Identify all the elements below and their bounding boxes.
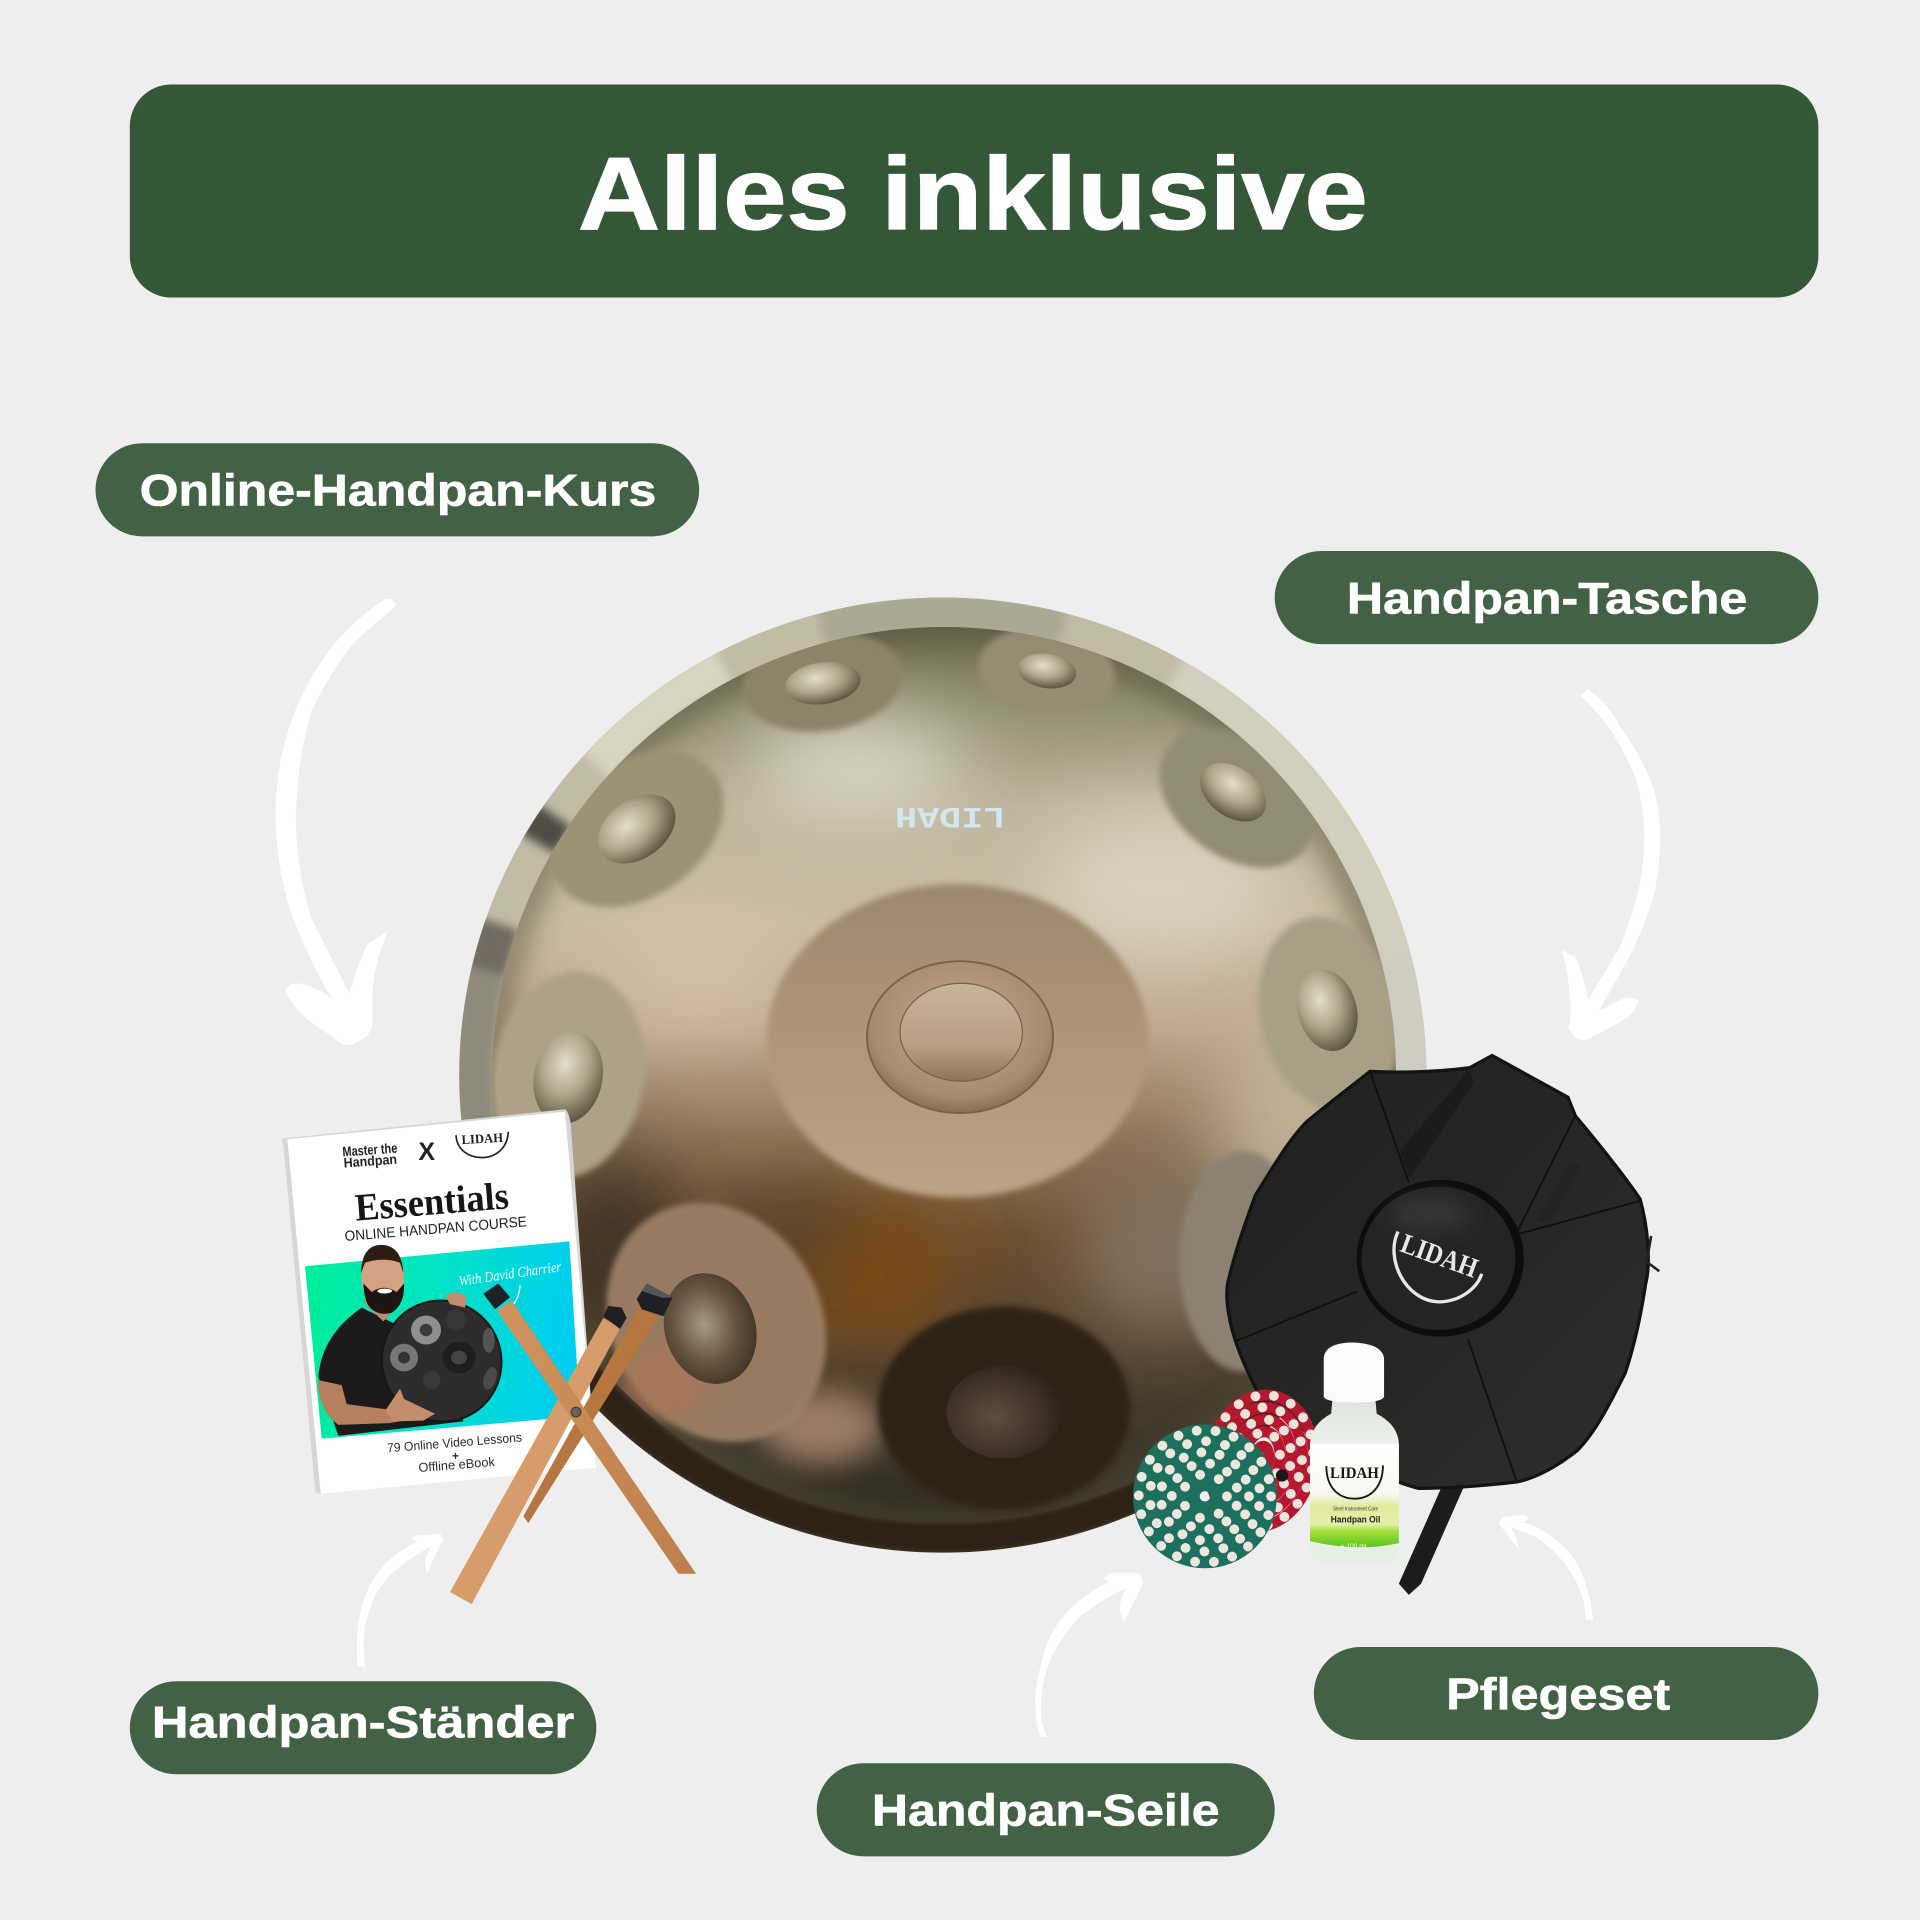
long leg (450, 1318, 620, 1604)
red rope coil (1199, 1387, 1323, 1535)
playing surface (492, 627, 1396, 1523)
cover logos: Handpan (343, 1152, 397, 1171)
cover logos: LIDAH (461, 1131, 503, 1147)
felt mallet ropes (1139, 1387, 1323, 1562)
bottle logo (1326, 1465, 1383, 1499)
label: Handpan-Seile: Handpan-Seile (872, 1787, 1220, 1836)
arrow: ropes (1035, 1573, 1143, 1737)
title banner: Alles inklusive (578, 136, 1368, 251)
presenter photo (318, 1245, 518, 1439)
label: Handpan-Staender (130, 1681, 596, 1774)
bottle cap (1324, 1343, 1384, 1402)
arrow: course (276, 599, 397, 1045)
tone field: right (1257, 915, 1396, 1108)
cover footer text: 79 Online Video Lessons (387, 1430, 522, 1455)
bottle neck and glass (1310, 1401, 1399, 1564)
bottle volume: ℮ 100 ml (1340, 1543, 1366, 1550)
cover footer text: Offline eBook (418, 1455, 496, 1475)
tone field: top left (742, 634, 901, 736)
tone field: left (492, 970, 645, 1180)
surface shading (475, 619, 1416, 1523)
central ding (867, 961, 1053, 1113)
bag logo: LIDAH (1396, 1228, 1482, 1285)
label: Handpan-Tasche (1275, 551, 1818, 644)
bottle label (1310, 1444, 1399, 1547)
tone field: top right (978, 631, 1116, 694)
cover logos: X (418, 1139, 436, 1166)
title banner (130, 84, 1818, 298)
rope knot (1276, 1469, 1288, 1482)
carrying bag (1227, 1055, 1659, 1595)
label: Pflegeset: Pflegeset (1446, 1670, 1670, 1719)
handpan instrument (459, 598, 1427, 1553)
tone field: upper right (1157, 730, 1312, 871)
arrow: bag (1562, 689, 1660, 1040)
label: Online-Handpan-Kurs (96, 443, 699, 536)
stand bolt (571, 1407, 581, 1417)
engraved logo: LIDAH (895, 799, 1005, 832)
label: Handpan-Staender: Handpan-Ständer (152, 1699, 574, 1748)
arrow: stand (357, 1534, 443, 1667)
tone field: upper left (554, 753, 726, 910)
presenter caption (458, 1259, 563, 1304)
cover logos: Master the (342, 1140, 398, 1160)
tone field: bottom (878, 1307, 1130, 1510)
label: Online-Handpan-Kurs: Online-Handpan-Kurs (140, 467, 656, 516)
presenter caption: With David Charrier (458, 1259, 563, 1290)
label: Pflegeset (1314, 1647, 1818, 1740)
cover logos (342, 1131, 508, 1171)
bag seams (1235, 1070, 1640, 1480)
wooden stand (450, 1283, 696, 1604)
cover title: Essentials (353, 1175, 510, 1230)
front leg (497, 1301, 696, 1574)
bottle product name: Handpan Oil (1331, 1514, 1380, 1525)
photo panel (305, 1241, 580, 1439)
central tone field (767, 884, 1149, 1198)
bag zipper (1647, 1236, 1659, 1271)
cover subtitle: ONLINE HANDPAN COURSE (344, 1214, 527, 1245)
bottle logo: LIDAH (1330, 1465, 1379, 1482)
cover footer text: + (452, 1449, 459, 1463)
back leg (523, 1306, 658, 1523)
arrow: care set (1499, 1515, 1593, 1620)
course book with stand (282, 1109, 696, 1604)
tone field: right lower (1178, 1149, 1274, 1375)
oil bottle (1310, 1343, 1399, 1564)
label: Handpan-Tasche: Handpan-Tasche (1347, 574, 1747, 623)
cover footer text (387, 1430, 522, 1475)
handpan rim (459, 598, 1427, 1553)
bottle care line: Steel Instrument Care (1333, 1506, 1378, 1512)
book cover (282, 1109, 596, 1494)
label: Handpan-Seile (817, 1763, 1275, 1856)
bag body (1227, 1055, 1648, 1488)
bag center disc (1357, 1180, 1524, 1337)
tone field: lower left (603, 1200, 830, 1446)
bag strap (1399, 1486, 1464, 1595)
green rope coil (1139, 1430, 1271, 1562)
